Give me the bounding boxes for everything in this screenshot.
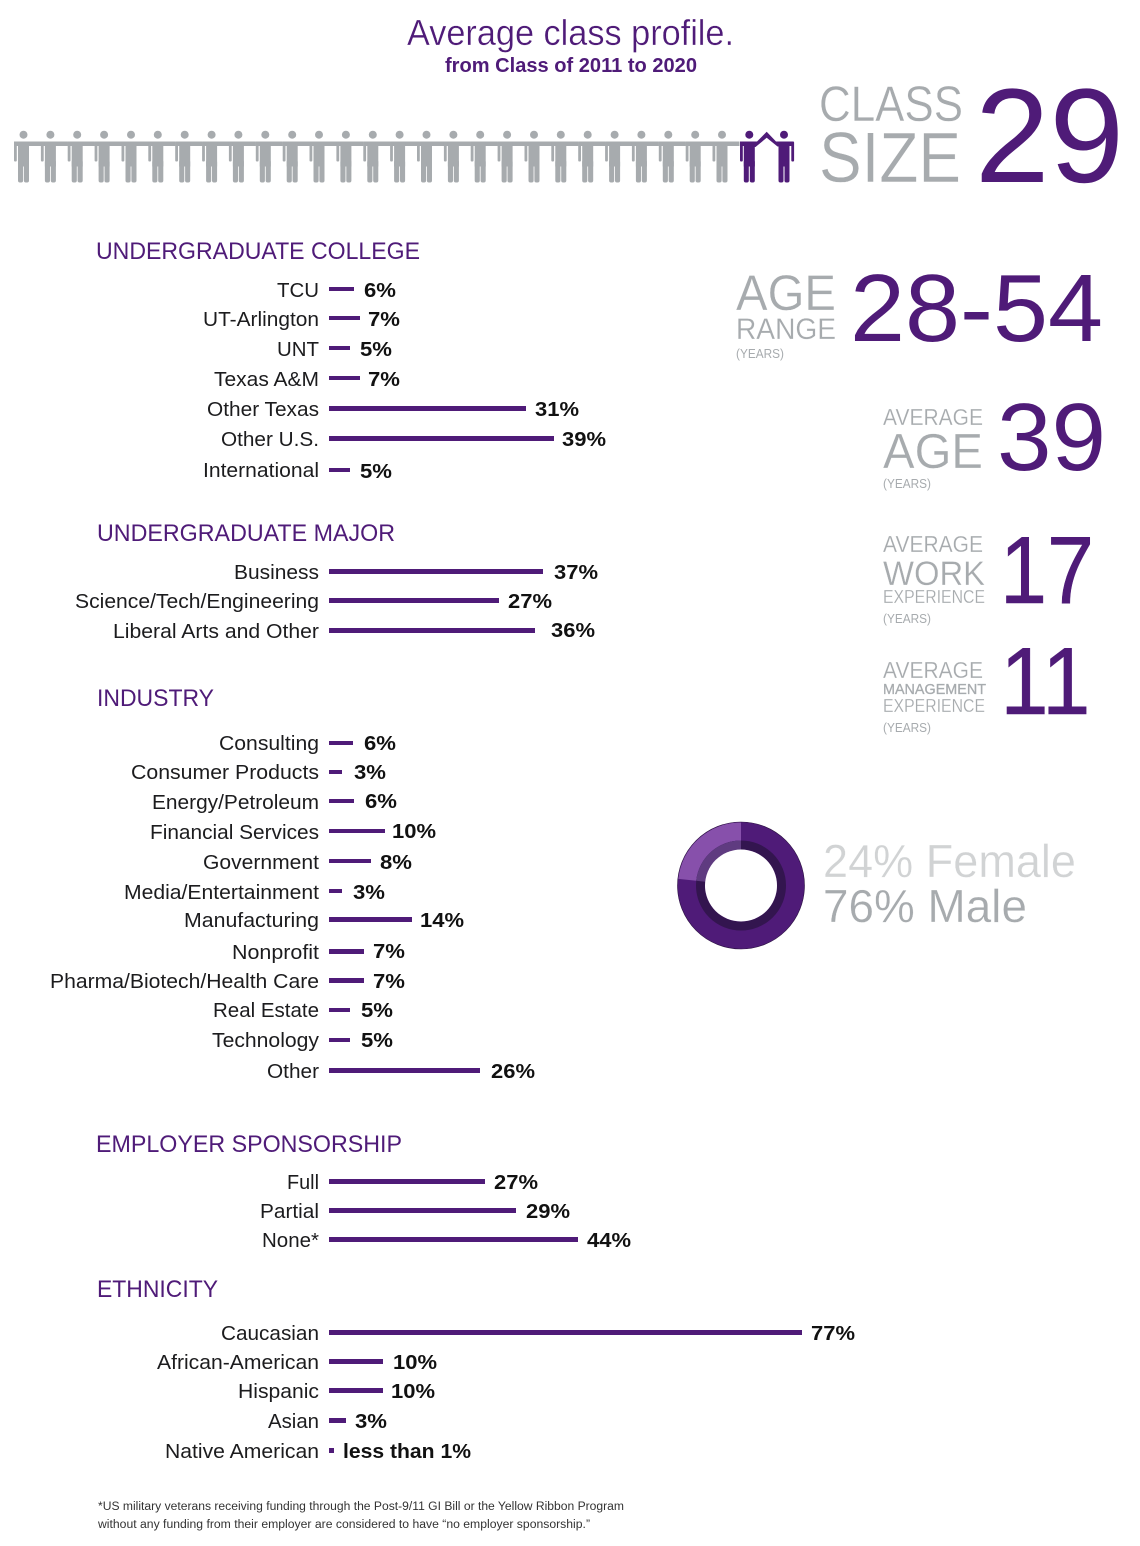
stat: average management experience: (YEARS)	[883, 720, 931, 735]
row: Pharma/Biotech/Health Care: Pharma/Biotech/Health Care	[50, 971, 319, 993]
row: Full: 27%	[494, 1171, 538, 1194]
row: TCU	[277, 279, 396, 302]
row: Liberal Arts and Other: Liberal Arts and Other	[113, 621, 319, 643]
row: Government	[203, 851, 412, 874]
row: International: 5%	[360, 460, 392, 483]
stat: average age	[883, 384, 1106, 491]
row: UT-Arlington	[203, 308, 400, 331]
chart: industry	[50, 732, 535, 1083]
row: Full	[287, 1171, 538, 1194]
chart: undergraduate college	[203, 279, 606, 483]
row: Caucasian: 77%	[811, 1322, 855, 1345]
stat: average work experience: EXPERIENCE	[883, 586, 985, 607]
stat: average work experience: WORK	[883, 555, 985, 593]
row: Manufacturing: 14%	[420, 909, 464, 932]
stat: average age: (YEARS)	[883, 476, 931, 491]
row: Real Estate	[213, 999, 393, 1022]
row: TCU: TCU	[277, 280, 319, 302]
stat: average management experience	[883, 628, 1090, 735]
row: UT-Arlington: 7%	[368, 308, 400, 331]
footnote	[97, 1501, 624, 1531]
title	[407, 12, 734, 77]
row: None*: None*	[262, 1230, 319, 1252]
row: Partial: 29%	[526, 1200, 570, 1223]
icon: row of people, class size pictogram	[14, 131, 794, 182]
row: Hispanic: 10%	[391, 1380, 435, 1403]
row: Media/Entertainment	[124, 881, 385, 904]
stat: average age: AVERAGE	[883, 404, 983, 430]
row: None*: 44%	[587, 1229, 631, 1252]
row: Nonprofit: 7%	[373, 940, 405, 963]
stat: average work experience: 17	[1000, 517, 1094, 624]
row: Financial Services: 10%	[392, 820, 436, 843]
footnote: *US military veterans receiving funding through the Post-9/11 GI Bill or the Yellow Ribbon Program	[98, 1501, 624, 1513]
row: Manufacturing	[184, 909, 464, 932]
row: Native American	[165, 1440, 471, 1463]
row: Media/Entertainment: Media/Entertainment	[124, 882, 319, 904]
row: Texas A&M: 7%	[368, 368, 400, 391]
row: UNT: UNT	[277, 339, 319, 361]
row: Liberal Arts and Other: 36%	[551, 619, 595, 642]
row: Nonprofit	[232, 940, 405, 964]
row: Other U.S.: Other U.S.	[221, 429, 319, 451]
stat: average management experience: MANAGEMENT	[883, 681, 986, 698]
row: Caucasian	[221, 1322, 855, 1345]
stat: average age: 39	[997, 384, 1106, 491]
stat: age range	[736, 255, 1103, 362]
legend: gender split: 24% Female	[823, 835, 1076, 887]
row: Real Estate: 5%	[361, 999, 393, 1022]
legend: gender split: 76% Male	[823, 880, 1027, 932]
row: Hispanic: Hispanic	[238, 1381, 319, 1403]
row: Other: Other	[267, 1061, 319, 1083]
row: Business	[234, 561, 598, 584]
row: Pharma/Biotech/Health Care	[50, 970, 405, 993]
row: Government: 8%	[380, 851, 412, 874]
row: International	[203, 460, 392, 483]
row: Asian: 3%	[355, 1410, 387, 1433]
row: Hispanic	[238, 1380, 435, 1403]
stat: average work experience: AVERAGE	[883, 531, 983, 557]
title: Average class profile.	[407, 12, 734, 53]
row: Consumer Products	[131, 761, 386, 784]
row: Liberal Arts and Other	[113, 619, 595, 643]
row: Science/Tech/Engineering: Science/Tech/Engineering	[75, 591, 319, 613]
row: Partial: Partial	[260, 1201, 319, 1223]
row: Other	[267, 1060, 535, 1083]
row: Other U.S.: 39%	[562, 428, 606, 451]
row: Financial Services	[150, 820, 436, 844]
stat: age range: (YEARS)	[736, 346, 784, 361]
row: Technology: Technology	[212, 1030, 319, 1052]
row: Texas A&M: Texas A&M	[214, 369, 319, 391]
legend: gender split	[823, 835, 1076, 932]
row: International: International	[203, 460, 319, 482]
row: Caucasian: Caucasian	[221, 1323, 319, 1345]
stat: age range: 28-54	[850, 255, 1103, 362]
heading: undergraduate major: UNDERGRADUATE MAJOR	[97, 520, 395, 547]
chart: undergraduate major	[75, 561, 598, 643]
chart: gender donut	[678, 822, 804, 949]
row: UNT	[277, 338, 392, 361]
row: Partial	[260, 1200, 570, 1223]
row: UT-Arlington: UT-Arlington	[203, 309, 319, 331]
row: Full: Full	[287, 1172, 319, 1194]
row: Consumer Products: Consumer Products	[131, 762, 319, 784]
row: None*	[262, 1229, 631, 1252]
row: Science/Tech/Engineering	[75, 590, 552, 613]
row: Technology: 5%	[361, 1029, 393, 1052]
stat: age range: RANGE	[736, 313, 836, 346]
chart: employer sponsorship	[260, 1171, 631, 1252]
heading: undergraduate college: UNDERGRADUATE COLLEGE	[96, 238, 420, 265]
row: Consulting: Consulting	[219, 733, 319, 755]
row: African-American: 10%	[393, 1351, 437, 1374]
heading: industry: INDUSTRY	[97, 685, 214, 712]
row: Other Texas: 31%	[535, 398, 579, 421]
stat: average age: AGE	[883, 425, 983, 479]
row: African-American	[157, 1351, 437, 1374]
row: Pharma/Biotech/Health Care: 7%	[373, 970, 405, 993]
stat: age range: AGE	[736, 265, 836, 321]
row: Consumer Products: 3%	[354, 761, 386, 784]
stat: class size: 29	[975, 62, 1124, 211]
stat: average work experience: (YEARS)	[883, 611, 931, 626]
stat: average management experience: 11	[1000, 628, 1090, 735]
heading: ethnicity: ETHNICITY	[97, 1276, 218, 1303]
row: Consulting	[219, 732, 396, 755]
row: Energy/Petroleum	[152, 790, 397, 814]
row: Other U.S.	[221, 428, 606, 451]
stat: class size: CLASS	[819, 76, 963, 132]
stat: class size: SIZE	[819, 119, 961, 198]
row: UNT: 5%	[360, 338, 392, 361]
row: TCU: 6%	[364, 279, 396, 302]
row: Financial Services: Financial Services	[150, 822, 319, 844]
row: Consulting: 6%	[364, 732, 396, 755]
stat: class size	[819, 62, 1124, 211]
row: Asian: Asian	[268, 1411, 319, 1433]
row: Energy/Petroleum: Energy/Petroleum	[152, 792, 319, 814]
row: Native American: less than 1%	[343, 1440, 471, 1463]
row: Technology	[212, 1029, 393, 1052]
row: Other Texas: Other Texas	[207, 399, 319, 421]
row: Energy/Petroleum: 6%	[365, 790, 397, 813]
row: Nonprofit: Nonprofit	[232, 942, 319, 964]
stat: average work experience	[883, 517, 1094, 626]
row: African-American: African-American	[157, 1352, 319, 1374]
stat: average management experience: AVERAGE	[883, 657, 983, 683]
heading: employer sponsorship: EMPLOYER SPONSORSHIP	[96, 1131, 402, 1158]
row: Other: 26%	[491, 1060, 535, 1083]
chart: ethnicity	[157, 1322, 855, 1463]
row: Native American: Native American	[165, 1441, 319, 1463]
row: Government: Government	[203, 852, 319, 874]
title: from Class of 2011 to 2020	[445, 55, 697, 77]
row: Media/Entertainment: 3%	[353, 881, 385, 904]
row: Real Estate: Real Estate	[213, 1000, 319, 1022]
row: Other Texas	[207, 398, 579, 421]
row: Manufacturing: Manufacturing	[184, 910, 319, 932]
row: Business: Business	[234, 562, 319, 584]
footnote: without any funding from their employer are considered to have “no employer sponsorship.”	[97, 1519, 590, 1531]
row: Science/Tech/Engineering: 27%	[508, 590, 552, 613]
row: Business: 37%	[554, 561, 598, 584]
row: Asian	[268, 1410, 387, 1433]
stat: average management experience: EXPERIENCE	[883, 695, 985, 716]
row: Texas A&M	[214, 368, 400, 391]
